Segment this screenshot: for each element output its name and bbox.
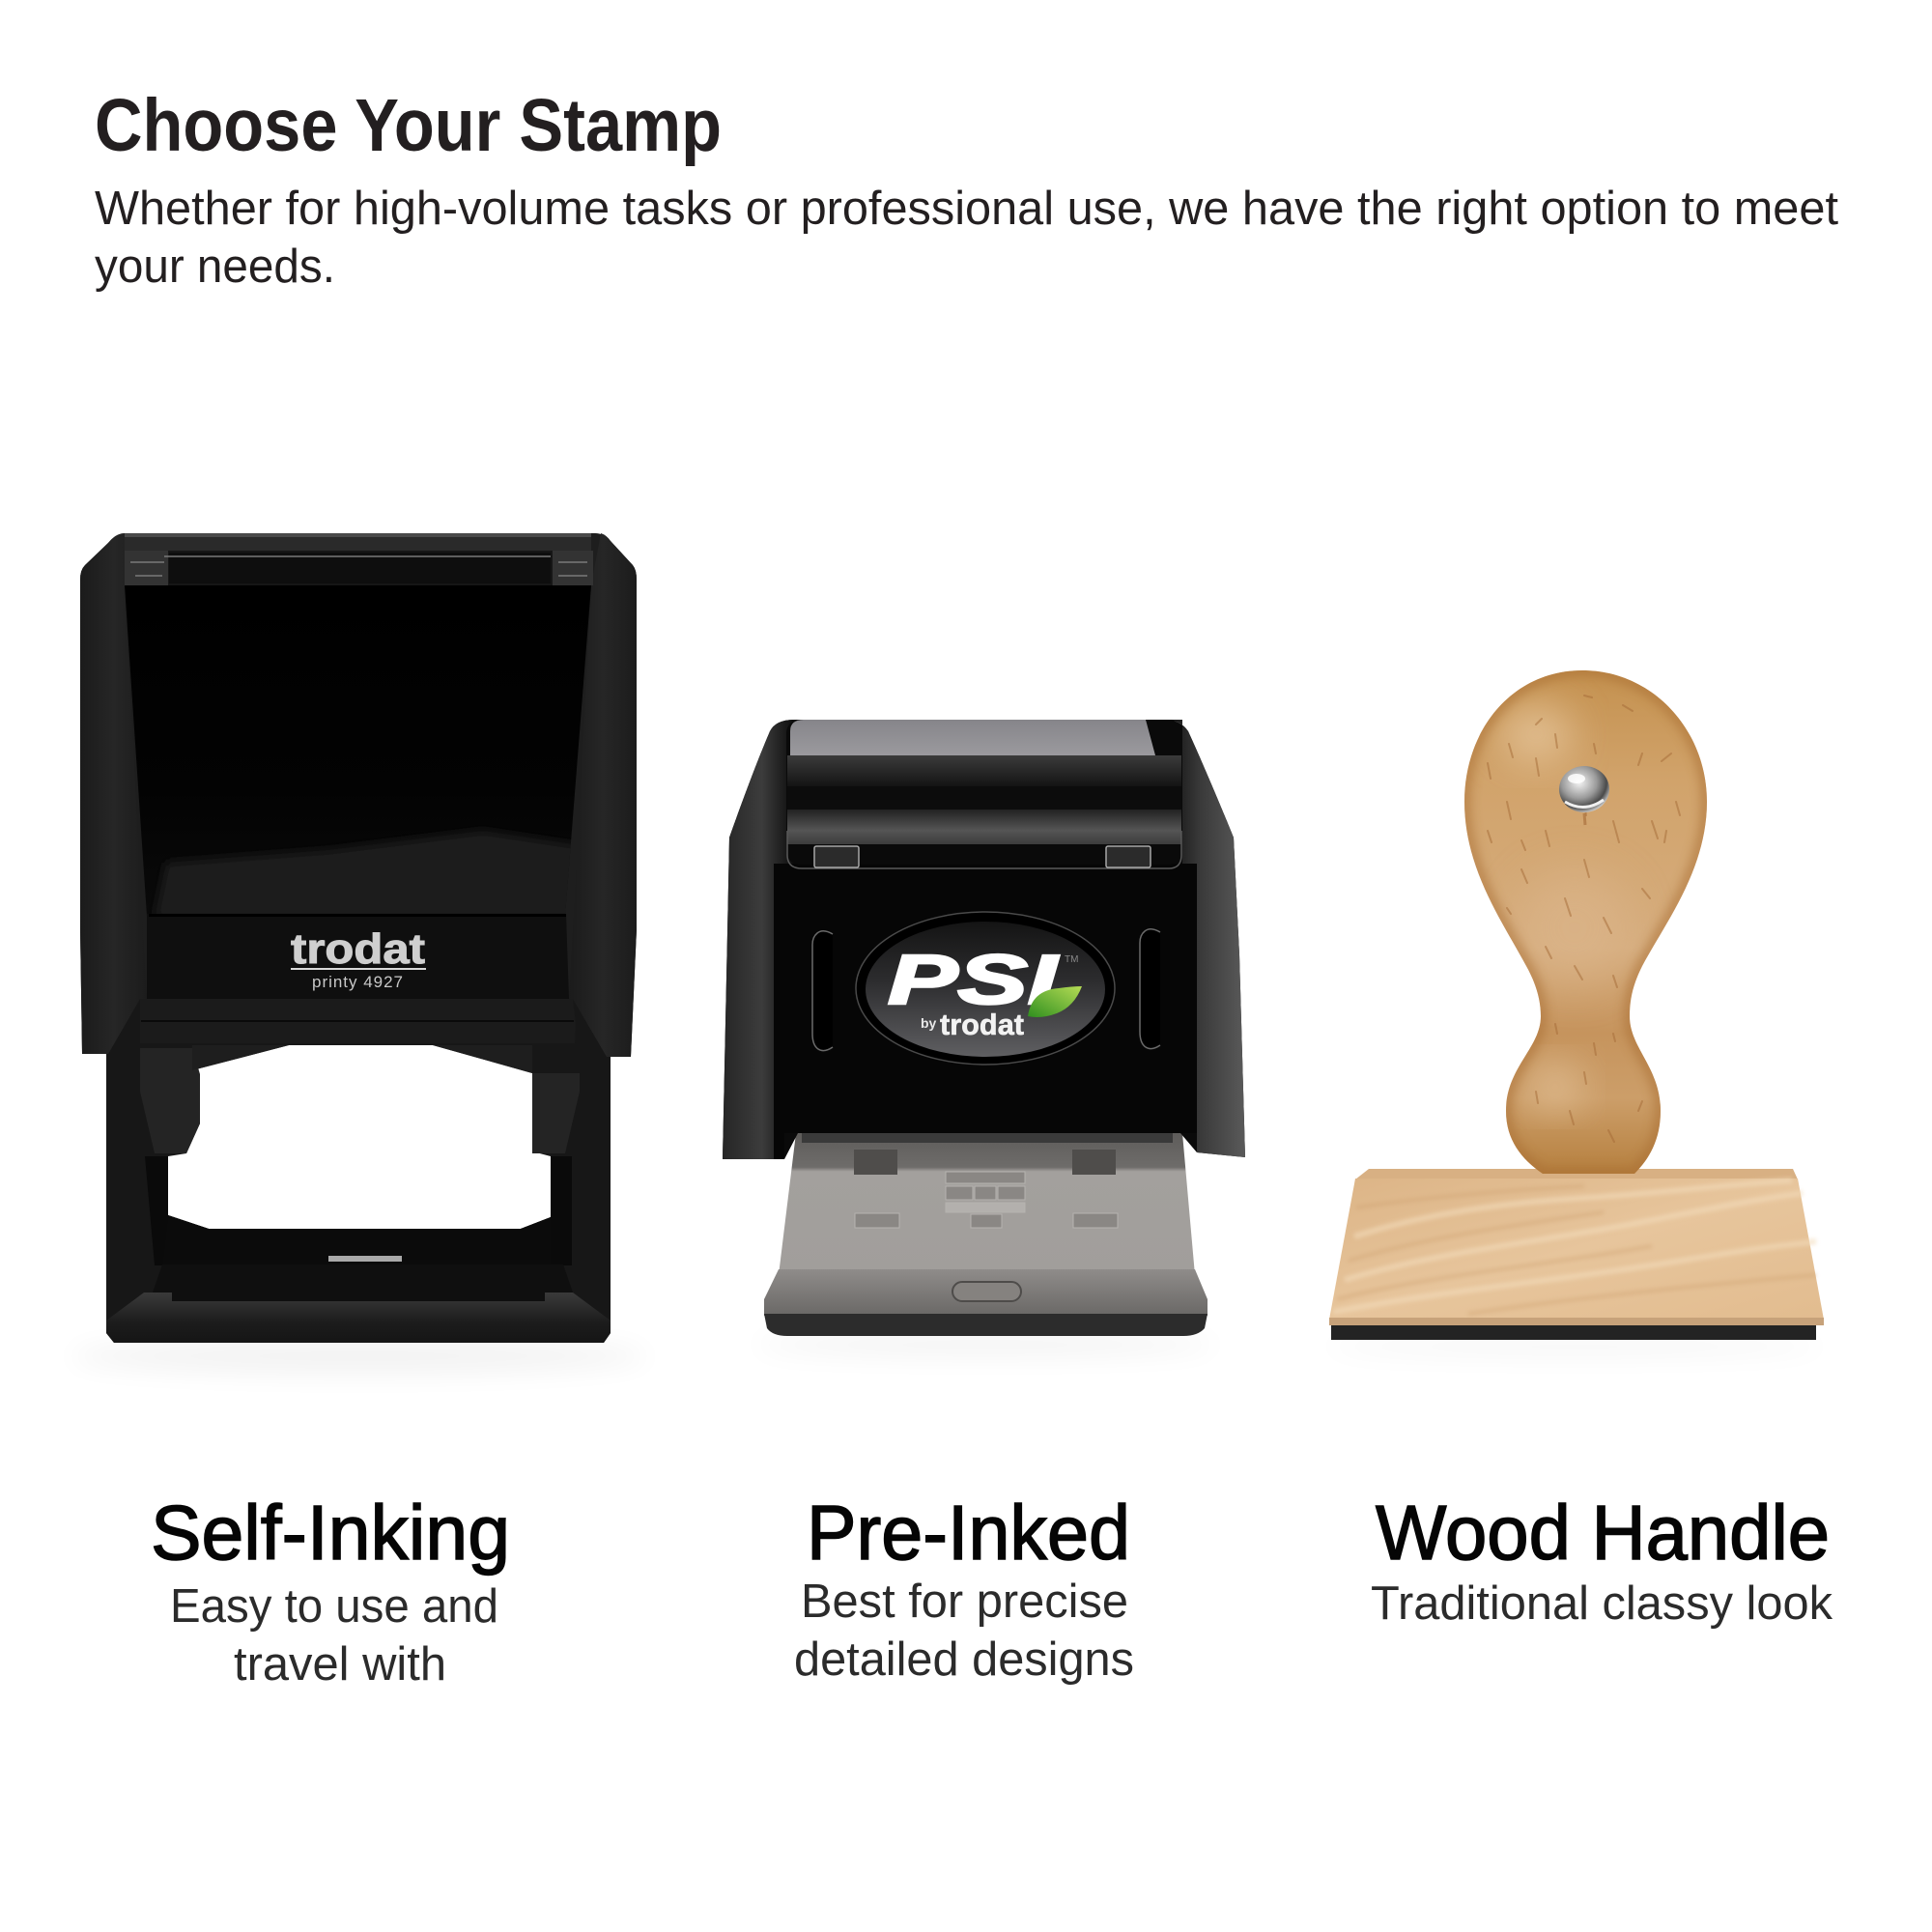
body — [723, 720, 1245, 1159]
foam pad — [1331, 1324, 1816, 1340]
hinge tabs — [814, 846, 1151, 867]
PSI badge: PSI — [888, 942, 1060, 1019]
label band — [147, 914, 569, 999]
wood handle stamp illustration — [1323, 667, 1826, 1354]
lower frame — [106, 999, 611, 1343]
wood grain — [1488, 696, 1680, 1142]
description: pre-inked: Best for precise — [801, 1576, 1128, 1628]
title: Choose Your Stamp — [95, 84, 722, 167]
handle — [1464, 670, 1707, 1174]
trodat logo: trodat — [291, 925, 425, 973]
intro text: your needs. — [95, 241, 335, 293]
intro text: Whether for high-volume tasks or professional use, we have the right option to meet — [95, 183, 1838, 235]
front frame band — [140, 999, 576, 1043]
description: pre-inked — [794, 1576, 1134, 1686]
wooden base — [1329, 1169, 1824, 1320]
housing details — [855, 1172, 1118, 1228]
body shell — [80, 533, 637, 1057]
PSI badge: by — [921, 1015, 937, 1031]
pre-inked stamp illustration — [723, 720, 1245, 1354]
metal rivet — [1559, 766, 1609, 825]
roller window — [786, 720, 1182, 868]
column: pre-inked — [794, 1490, 1134, 1686]
front panel — [125, 585, 591, 916]
column: self-inking — [151, 1490, 510, 1690]
description: self-inking: travel with — [234, 1638, 446, 1690]
column: wood handle — [1371, 1490, 1833, 1630]
intro text — [95, 183, 1838, 293]
description: self-inking: Easy to use and — [170, 1580, 498, 1633]
top hinge window — [125, 533, 591, 585]
description: wood handle: Traditional classy look — [1371, 1577, 1833, 1630]
PSI badge: TM — [1065, 954, 1078, 965]
PSI badge — [856, 912, 1115, 1065]
heading: self-inking: Self-Inking — [151, 1490, 510, 1576]
description: self-inking — [170, 1580, 498, 1690]
PSI badge: trodat — [940, 1008, 1024, 1041]
heading: pre-inked: Pre-Inked — [807, 1490, 1130, 1576]
model name: printy 4927 — [312, 973, 403, 991]
base plate — [162, 1215, 551, 1265]
description: pre-inked: detailed designs — [794, 1634, 1134, 1686]
heading: wood handle: Wood Handle — [1376, 1490, 1830, 1576]
clear lower housing — [779, 1133, 1195, 1275]
self-inking stamp illustration — [70, 533, 649, 1374]
side slots — [812, 929, 1160, 1051]
